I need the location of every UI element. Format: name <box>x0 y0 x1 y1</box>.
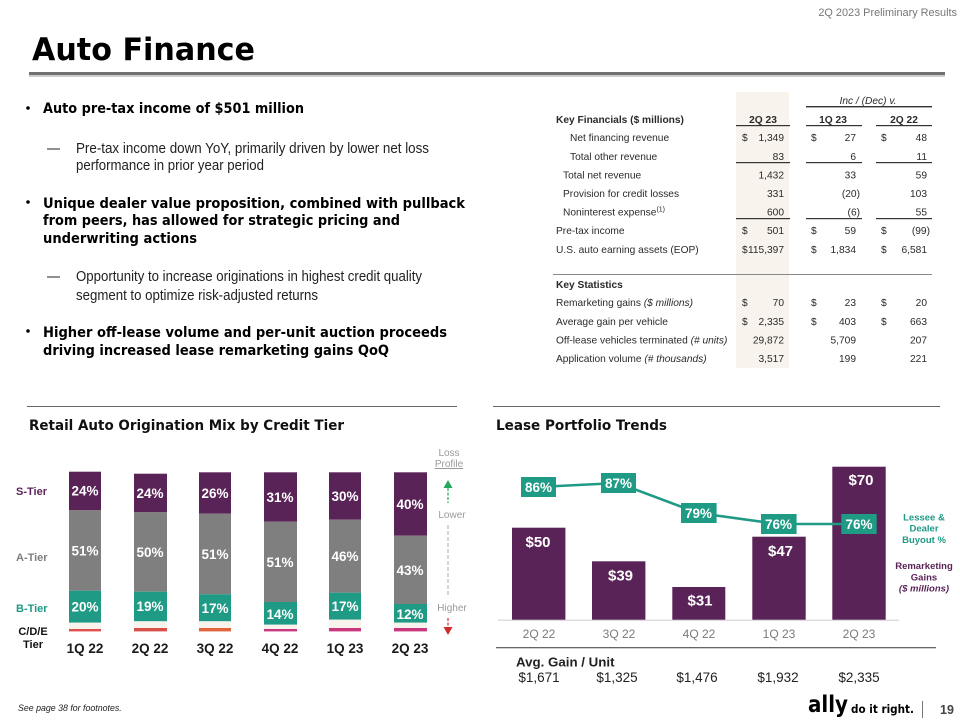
sub-bullet: originations opportunity: Opportunity to increase originations in highest credit quality <box>76 269 423 285</box>
header tag: 2Q 2023 Preliminary Results <box>818 7 958 19</box>
panel: key bullet points <box>26 101 466 359</box>
key statistics rows: 70 <box>773 298 784 309</box>
bar 2Q 22: 24% <box>136 486 164 501</box>
bar 2Q 22: 2Q 22 <box>132 641 168 656</box>
key financials rows: $ <box>881 133 887 144</box>
key statistics rows: Remarketing gains ($ millions) <box>556 298 693 309</box>
key statistics rows: Application volume (# thousands) <box>556 354 707 365</box>
key statistics rows: 29,872 <box>753 336 784 346</box>
key financials rows: 83 <box>773 152 784 163</box>
tier labels: C/D/E <box>18 626 48 638</box>
x axis labels: 4Q 22 <box>683 627 716 641</box>
bar 3Q 22 <box>197 472 233 656</box>
label 79%: 79% <box>685 506 712 521</box>
key financials rows: $ <box>742 245 748 256</box>
key financials rows: Total other revenue <box>570 152 658 163</box>
avg gain per unit row: $1,932 <box>757 670 799 685</box>
bullet: pre-tax income: Auto pre-tax income of $501 million <box>43 101 304 117</box>
label 76% <box>841 514 877 534</box>
bar 4Q 22: 14% <box>266 607 294 622</box>
key financials rows: 59 <box>845 226 856 237</box>
x axis labels: 1Q 23 <box>763 627 796 641</box>
bullet: lease remarketing <box>26 325 447 359</box>
key financials rows: 59 <box>916 170 927 182</box>
key financials rows: (99) <box>912 226 930 237</box>
key financials rows: 6,581 <box>902 245 927 256</box>
avg gain per unit row <box>516 654 880 685</box>
key financials rows <box>556 133 930 256</box>
key financials rows: 55 <box>916 208 927 218</box>
bar 1Q 23: 1Q 23 <box>327 641 364 656</box>
sub-bullet: pre-tax income driver: Pre-tax income down YoY, primarily driven by lower net loss <box>76 141 429 157</box>
key financials rows: $ <box>881 245 887 256</box>
label 76% <box>761 514 797 534</box>
bullet: lease remarketing: Higher off-lease volume and per-unit auction proceeds <box>43 325 447 341</box>
key financials rows: $ <box>811 133 817 144</box>
loss profile scale: Profile <box>435 459 464 470</box>
bar $47 <box>752 537 806 620</box>
bar 4Q 22: 31% <box>266 490 294 505</box>
sub-bullet: pre-tax income driver: – <box>47 141 60 157</box>
bar 2Q 23 <box>392 472 429 656</box>
key financials rows: 600 <box>767 208 784 218</box>
label 76%: 76% <box>845 517 873 532</box>
key financials rows: 1,432 <box>758 170 784 182</box>
key financials rows: 27 <box>845 133 856 144</box>
key financials rows: 501 <box>767 226 784 237</box>
legend: buyout: Buyout % <box>902 535 946 546</box>
bar 1Q 22: 24% <box>71 484 99 498</box>
key statistics rows: 221 <box>910 354 927 365</box>
bar 1Q 23: 30% <box>331 489 359 504</box>
chart: origination mix stacked bars <box>67 472 429 656</box>
avg gain per unit row: $1,671 <box>518 670 560 685</box>
bar $39: $39 <box>608 568 633 584</box>
key statistics rows: 5,709 <box>830 336 856 346</box>
bar 1Q 23: 46% <box>331 549 359 564</box>
bar 2Q 23: 43% <box>396 563 424 578</box>
tier labels: Tier <box>23 639 44 651</box>
key statistics rows: Key Statistics <box>556 280 623 291</box>
key financials rows: 6 <box>850 152 856 163</box>
bullet: dealer value proposition: from peers, has allowed for strategic pricing and <box>43 213 400 229</box>
key financials rows: Noninterest expense <box>563 208 656 218</box>
bullet: dealer value proposition: underwriting actions <box>43 231 197 247</box>
key financials rows: 115,397 <box>748 245 784 256</box>
key statistics rows: 2,335 <box>758 317 784 328</box>
bar 2Q 23: 12% <box>396 607 424 622</box>
legend: buyout: Dealer <box>909 524 939 534</box>
key statistics rows: 207 <box>910 336 927 346</box>
avg gain per unit row: $1,325 <box>596 670 638 685</box>
bar 3Q 22: 51% <box>201 547 229 562</box>
panel: financial table: Inc / (Dec) v. <box>840 96 896 107</box>
bar 1Q 23 <box>327 472 364 656</box>
bar $70 <box>832 467 886 620</box>
sub-bullet: originations opportunity <box>47 269 423 304</box>
tier labels <box>16 486 48 651</box>
x axis labels: 2Q 22 <box>523 627 556 641</box>
tier labels: S-Tier <box>16 486 48 498</box>
x axis labels: 3Q 22 <box>603 627 636 641</box>
bullet: dealer value proposition: Unique dealer value proposition, combined with pullback <box>43 196 466 212</box>
chart: lease remarketing gains bars <box>498 467 899 621</box>
bar $70: $70 <box>848 472 874 489</box>
logo: ally <box>808 692 848 718</box>
key statistics rows: $ <box>742 317 748 328</box>
key statistics rows: $ <box>811 298 817 309</box>
legend: buyout: Lessee & <box>903 512 945 524</box>
bar 4Q 22: 4Q 22 <box>262 641 298 656</box>
loss profile scale: Higher <box>437 603 467 614</box>
key statistics rows <box>556 280 927 365</box>
key statistics rows: 663 <box>910 317 927 328</box>
key financials rows: $ <box>742 133 748 144</box>
legend: remarketing: ($ millions) <box>899 584 949 594</box>
key financials rows: Total net revenue <box>563 170 641 182</box>
bullet: lease remarketing: driving increased lease remarketing gains QoQ <box>43 343 389 359</box>
key statistics rows: 3,517 <box>758 354 784 365</box>
footnote: See page 38 for footnotes. <box>18 703 122 713</box>
bar $47: $47 <box>768 543 793 560</box>
loss profile scale: Lower <box>438 510 466 521</box>
key statistics rows: Off-lease vehicles terminated (# units) <box>556 336 727 346</box>
key statistics rows: $ <box>881 317 887 328</box>
page number: 19 <box>940 703 954 717</box>
avg gain per unit row: $1,476 <box>676 670 718 685</box>
key financials rows: $ <box>811 226 817 237</box>
legend: remarketing: Remarketing <box>895 561 953 572</box>
bar 1Q 22: 20% <box>71 600 99 614</box>
key financials rows: 33 <box>845 170 856 182</box>
bar 1Q 22 <box>67 472 103 656</box>
bar 2Q 22 <box>132 474 168 656</box>
key statistics rows: Average gain per vehicle <box>556 317 668 328</box>
label 86%: 86% <box>525 480 552 495</box>
key financials rows: Provision for credit losses <box>563 189 679 200</box>
bar 2Q 22: 50% <box>136 545 164 560</box>
key financials rows: 331 <box>767 189 784 200</box>
bar 3Q 22: 26% <box>201 486 229 501</box>
bar 2Q 23: 40% <box>396 497 424 512</box>
heading: origination mix: Retail Auto Origination Mix by Credit Tier <box>29 418 345 434</box>
key financials rows: 11 <box>916 152 927 163</box>
table header row: 2Q 23 <box>749 115 777 126</box>
panel: financial table <box>553 92 932 368</box>
key financials rows: 48 <box>916 133 927 144</box>
label 76%: 76% <box>765 517 792 532</box>
key statistics rows: 403 <box>839 317 856 328</box>
bar $50: $50 <box>525 534 551 551</box>
bar $50 <box>512 528 565 620</box>
key financials rows: (1) <box>656 206 665 214</box>
sub-bullet: originations opportunity: segment to optimize risk-adjusted returns <box>76 288 318 304</box>
key financials rows: U.S. auto earning assets (EOP) <box>556 245 699 256</box>
key statistics rows: $ <box>811 317 817 328</box>
key financials rows: (6) <box>848 208 860 218</box>
key statistics rows: $ <box>881 298 887 309</box>
loss profile scale <box>435 448 467 635</box>
sub-bullet: pre-tax income driver <box>47 141 429 174</box>
legend: remarketing: Gains <box>911 572 937 584</box>
legend: buyout <box>902 512 946 546</box>
key financials rows: $ <box>811 245 817 256</box>
tier labels: A-Tier <box>16 552 48 564</box>
tier labels: B-Tier <box>16 603 48 615</box>
table header row: Key Financials ($ millions) <box>556 115 684 126</box>
label 87%: 87% <box>605 476 632 491</box>
sub-bullet: originations opportunity: – <box>47 269 60 285</box>
chart: buyout percent line <box>521 473 877 534</box>
label 86% <box>521 477 556 497</box>
key financials rows: Net financing revenue <box>570 133 669 144</box>
bar 1Q 23: 17% <box>331 599 359 614</box>
key statistics rows: 23 <box>845 298 856 309</box>
title: Auto Finance <box>32 32 255 68</box>
bar 3Q 22: 17% <box>201 601 229 616</box>
key statistics rows: 20 <box>916 298 927 309</box>
key financials rows: (20) <box>842 189 860 200</box>
label 87% <box>601 473 636 493</box>
sub-bullet: pre-tax income driver: performance in prior year period <box>76 158 264 174</box>
logo <box>808 692 923 718</box>
key financials rows: 1,834 <box>830 245 856 256</box>
bullet: dealer value proposition <box>26 196 466 247</box>
bar 4Q 22: 51% <box>266 555 294 570</box>
bar 1Q 22: 1Q 22 <box>67 641 103 656</box>
table header row <box>556 115 918 126</box>
avg gain per unit row: Avg. Gain / Unit <box>516 654 615 670</box>
key financials rows: $ <box>742 226 748 237</box>
label 79% <box>681 503 717 523</box>
bar 2Q 23: 2Q 23 <box>392 641 429 656</box>
table header row: 1Q 23 <box>819 115 847 126</box>
key financials rows: Pre-tax income <box>556 226 625 237</box>
bar $39 <box>592 561 645 620</box>
bar 2Q 22: 19% <box>136 599 164 614</box>
legend: remarketing <box>895 561 953 594</box>
key financials rows: $ <box>881 226 887 237</box>
table header row: 2Q 22 <box>890 115 918 126</box>
x axis labels: 2Q 23 <box>843 627 876 641</box>
avg gain per unit row: $2,335 <box>838 670 880 685</box>
bar 4Q 22 <box>262 472 298 656</box>
bar $31: $31 <box>687 592 713 610</box>
loss profile scale: Loss <box>438 448 460 459</box>
key statistics rows: $ <box>742 298 748 309</box>
key financials rows: 103 <box>910 189 927 200</box>
key statistics rows: 199 <box>839 354 856 365</box>
x axis labels <box>523 627 876 641</box>
logo: do it right. <box>851 702 914 716</box>
heading: lease trends: Lease Portfolio Trends <box>496 418 667 434</box>
bar 3Q 22: 3Q 22 <box>197 641 233 656</box>
bar $31 <box>672 587 725 620</box>
bar 1Q 22: 51% <box>71 544 99 558</box>
key financials rows: 1,349 <box>758 133 784 144</box>
